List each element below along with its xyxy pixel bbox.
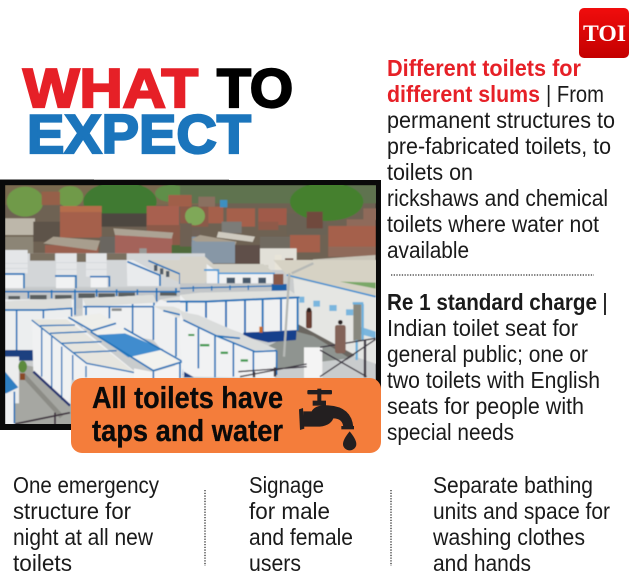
text block: bathing units — [432, 472, 610, 576]
text block: different toilets: permanent structures to — [387, 107, 615, 133]
front blue-roof block — [74, 314, 88, 325]
right-top row part — [153, 300, 182, 366]
text block: different toilets — [387, 55, 615, 263]
text block: standard charge: | — [602, 289, 608, 315]
text block: different toilets: Different toilets for — [387, 55, 581, 81]
text block: emergency structure: night at all new — [13, 524, 153, 550]
text block: standard charge: general public; one or — [387, 341, 588, 367]
text block: emergency structure: structure for — [13, 498, 131, 524]
houses and trees, right half — [180, 182, 377, 270]
title: TO — [217, 57, 293, 119]
text block: signage: for male — [249, 498, 330, 524]
callout: all toilets have taps and water: All toilets have — [92, 380, 283, 415]
TOI logo — [579, 8, 629, 58]
text block: different toilets: pre-fabricated toilets, to — [387, 133, 611, 159]
text block: standard charge: seats for people with — [387, 393, 584, 419]
text block: standard charge: two toilets with English — [387, 367, 600, 393]
right large building — [273, 260, 377, 297]
title — [23, 57, 293, 165]
text block: bathing units: Separate bathing — [433, 472, 593, 498]
toilet rows, right half — [180, 257, 377, 378]
text block: emergency structure: toilets — [13, 550, 72, 576]
text block: standard charge: Indian toilet seat for — [387, 315, 578, 341]
left post and small block — [5, 357, 19, 403]
text block: signage: Signage — [249, 472, 324, 498]
callout: all toilets have taps and water: taps and water — [92, 413, 283, 448]
row 2 — [83, 295, 156, 340]
long back row — [5, 288, 200, 308]
toilet rows, left half — [5, 250, 205, 427]
text block: different toilets: | From — [546, 81, 604, 107]
callout: all toilets have taps and water — [71, 378, 381, 453]
text block: bathing units: washing clothes — [432, 524, 585, 550]
title: EXPECT — [27, 103, 251, 165]
text block: different toilets: toilets on — [387, 159, 473, 185]
text block: standard charge: Re 1 standard charge — [387, 289, 597, 315]
post, fence, people, pole — [304, 347, 322, 378]
text block: signage — [249, 472, 353, 576]
text block: standard charge — [387, 289, 608, 445]
text block: emergency structure — [13, 472, 159, 576]
ground — [13, 363, 72, 427]
title: WHAT — [23, 57, 198, 119]
front left block — [32, 317, 136, 405]
text block: signage: and female — [249, 524, 353, 550]
centre row — [180, 291, 299, 334]
text block: different toilets: rickshaws and chemical — [387, 185, 608, 211]
text block: different toilets: available — [387, 237, 469, 263]
text block: emergency structure: One emergency — [13, 472, 159, 498]
text block: signage: users — [249, 550, 301, 576]
photo: prefabricated toilets in a slum — [0, 180, 381, 430]
text block: standard charge: special needs — [387, 419, 514, 445]
text block: different toilets: different slums — [387, 81, 540, 107]
TOI logo: TOI — [583, 21, 626, 46]
text block: bathing units: and hands — [433, 550, 531, 576]
text block: bathing units: units and space for — [433, 498, 610, 524]
icon: water tap with drop — [299, 389, 356, 450]
walkway and floor — [297, 323, 355, 360]
houses and trees, left half — [5, 185, 198, 254]
text block: different toilets: toilets where water not — [387, 211, 600, 237]
front right row — [180, 312, 277, 378]
left middle row — [5, 299, 74, 351]
